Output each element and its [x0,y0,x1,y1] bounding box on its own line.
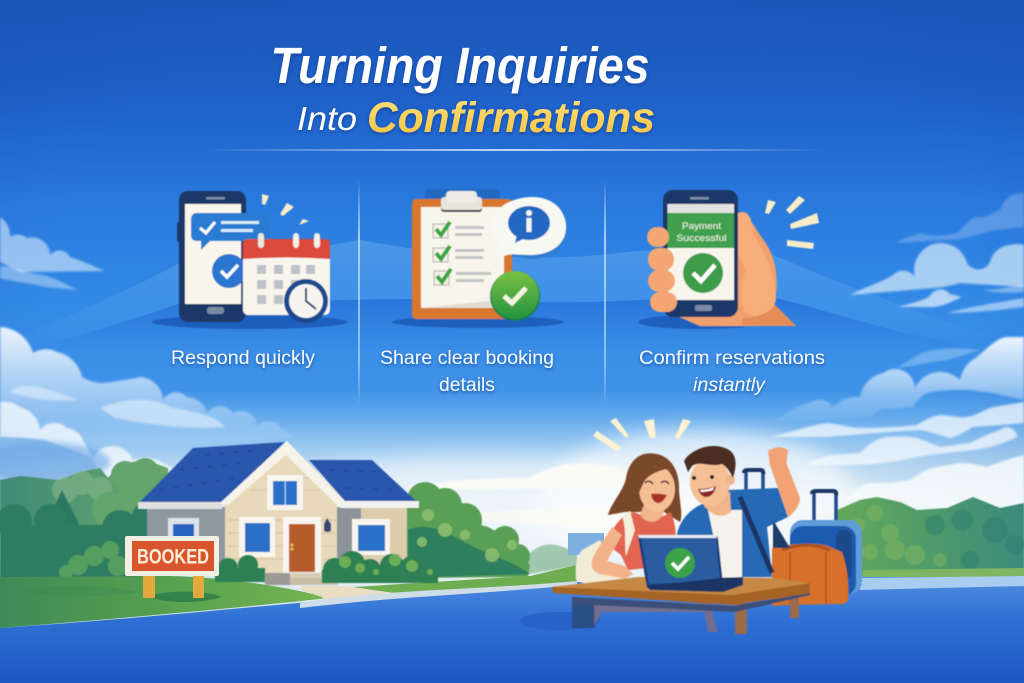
laptop [638,535,743,592]
clouds: middle left [0,327,293,478]
woman [591,453,681,579]
ground: lawns [0,565,1024,628]
clouds: horizon band [405,464,660,526]
sparkle rays [593,418,691,452]
background hills [0,240,1024,350]
title [270,37,655,142]
icon: hand holding phone [638,190,819,329]
sign: booked: BOOKED [137,546,209,568]
title divider [205,149,825,151]
icon: phone, chat and calendar [152,191,348,329]
clouds: upper right [850,193,1024,313]
trees: left [0,458,172,580]
background building by couple [568,533,604,555]
label: confirm reservations instantly [639,347,825,396]
icon: hand holding phone: Payment [682,221,721,232]
panel: share clear booking details [380,189,568,396]
panel: respond quickly [152,191,348,369]
path to house [300,581,577,608]
icon: hand holding phone: Successful [676,233,726,244]
luggage [744,470,862,606]
title: Into [297,100,357,137]
label: confirm reservations instantly: Confirm reservations [639,347,825,369]
panel: confirm reservations instantly [638,190,825,396]
water foreground [0,576,1024,683]
trees: right [837,497,1024,577]
label: share clear booking details: Share clear booking [380,347,554,369]
label: respond quickly: Respond quickly [171,347,315,369]
backpack bag [576,540,620,584]
label: share clear booking details: details [439,374,495,396]
illustration: house [138,441,419,585]
title: Turning Inquiries [270,37,650,94]
blue sky patch, left [0,442,110,482]
clouds: middle right [770,337,1024,515]
table [552,577,810,634]
illustration: happy couple at laptop [552,418,862,634]
clouds: upper left [0,217,105,290]
column dividers [358,180,606,405]
title: Confirmations [367,94,655,142]
label: confirm reservations instantly: instantly [693,374,766,396]
sign: booked [125,536,219,598]
shrubs by house [215,551,438,583]
man [676,446,800,577]
label: share clear booking details [380,347,554,396]
trees: centre right of house [405,482,577,578]
icon: clipboard with info bubble [392,189,568,328]
